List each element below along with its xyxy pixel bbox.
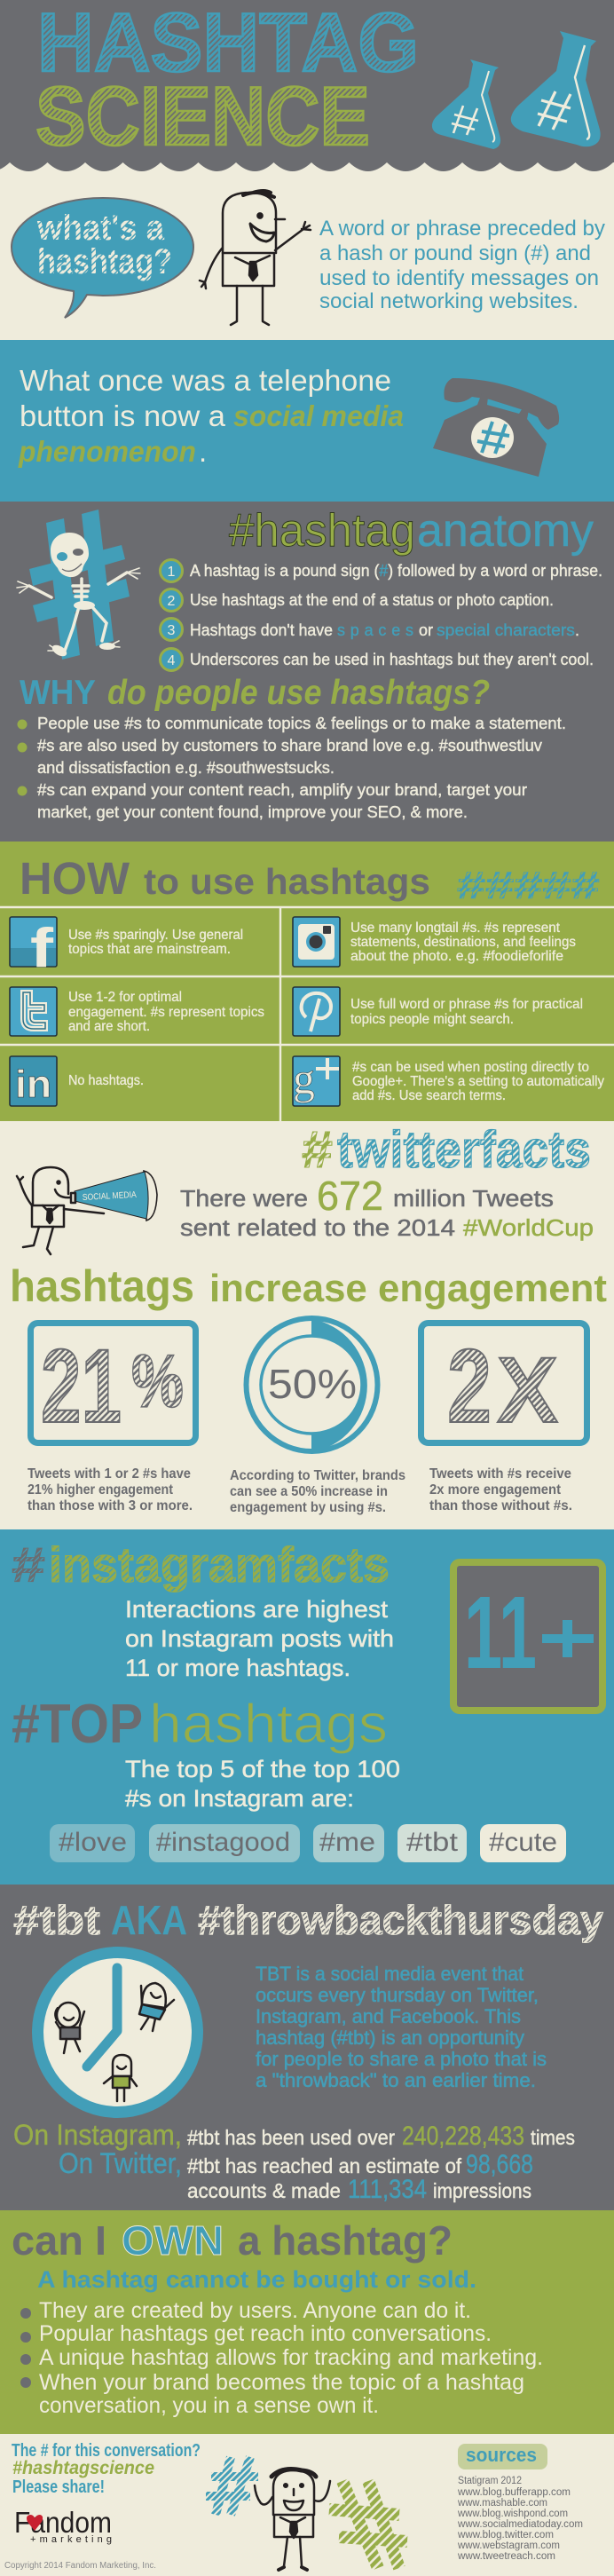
- panel: what's a hashtag: [12, 191, 605, 325]
- heading: #tbt AKA #throwbackthursday: #throwbackthursday: [198, 1897, 603, 1943]
- badge 1: [160, 559, 183, 582]
- why list: [18, 714, 566, 821]
- heading: #twitterfacts: twitterfacts: [337, 1121, 591, 1179]
- stat: on twitter: #tbt has reached an estimate of: [187, 2154, 461, 2177]
- tag: me: [313, 1824, 384, 1862]
- heading: can I own a hashtag: [12, 2217, 453, 2264]
- definition text: [319, 217, 605, 313]
- text: twitter: and are short.: [68, 1019, 150, 1034]
- cartoon man with megaphone: [17, 1167, 157, 1254]
- logo: fandom marketing: Fandom: [14, 2506, 112, 2539]
- definition text: used to identify messages on: [319, 266, 599, 290]
- text: google plus: add #s. Use search terms.: [352, 1088, 506, 1103]
- logo: fandom marketing: +marketing: [30, 2534, 112, 2545]
- stat: on twitter: 111,334: [348, 2175, 427, 2204]
- text: 672 million tweets: million Tweets: [393, 1187, 554, 1212]
- text: 672 million tweets: #WorldCup: [463, 1216, 594, 1241]
- panel: can i own a hashtag: [0, 2210, 614, 2434]
- heading: #TOP hashtags: #TOP: [12, 1694, 143, 1755]
- panel: telephone button: [0, 340, 614, 502]
- text: 672 million tweets: sent related to the 2014: [180, 1216, 455, 1241]
- own list: Popular hashtags get reach into conversations.: [39, 2321, 492, 2346]
- stat: on twitter: On Twitter,: [59, 2147, 182, 2179]
- panel: how to use hashtags: [0, 842, 614, 1121]
- heading: how: HOW: [20, 853, 130, 904]
- text: instagram: [350, 921, 576, 964]
- stat box: 2X: 2: [447, 1328, 492, 1445]
- why list: #s can expand your content reach, amplify your brand, target your: [37, 780, 527, 799]
- heading: how: [20, 853, 430, 904]
- speech bubble: [12, 198, 193, 318]
- stat box: 2X: X: [497, 1339, 558, 1442]
- text: google plus: [352, 1060, 604, 1103]
- text: tbt description: occurs every thursday on Twitter,: [256, 1984, 539, 2006]
- definition text: A word or phrase preceded by: [319, 217, 605, 241]
- icon: small flask: [432, 59, 500, 149]
- text: facebook: topics that are mainstream.: [68, 942, 231, 957]
- definition text: social networking websites.: [319, 289, 579, 313]
- sources tag: sources: [466, 2444, 537, 2466]
- definition text: a hash or pound sign (#) and: [319, 241, 591, 265]
- figure: man in green: [104, 2055, 137, 2101]
- icon: facebook: [10, 917, 57, 979]
- icon: blue hash: [206, 2457, 258, 2515]
- sources list: www.tweetreach.com: [457, 2551, 555, 2562]
- icon: google plus: [293, 1054, 340, 1106]
- stat: on twitter: accounts & made: [187, 2179, 341, 2202]
- figure: woman: [55, 2003, 84, 2053]
- text: 672 million tweets: There were: [180, 1187, 308, 1212]
- stat: on instagram: times: [531, 2126, 575, 2149]
- text: interactions: 11 or more hashtags.: [125, 1655, 350, 1681]
- badge 4: 4: [168, 653, 176, 668]
- text: instagram: Use many longtail #s. #s represent: [350, 921, 561, 936]
- text: tbt description: Instagram, and Facebook. This: [256, 2005, 521, 2027]
- item 3: or: [419, 621, 433, 639]
- text: interactions: [125, 1596, 394, 1681]
- icon: large flask: [511, 31, 601, 146]
- badge 3: [160, 618, 183, 641]
- why list: market, get your content found, improve your SEO, & more.: [37, 802, 468, 821]
- own list: [20, 2298, 543, 2418]
- heading: can I own a hashtag: a hashtag?: [238, 2217, 453, 2264]
- icon: google plus: g: [293, 1054, 315, 1103]
- item 4: Underscores can be used in hashtags but they aren't cool.: [190, 651, 594, 668]
- item 3: .: [575, 621, 579, 639]
- sources list: www.mashable.com: [457, 2498, 547, 2509]
- heading: #hashtag anatomy: [229, 505, 594, 557]
- sources list: Statigram 2012: [458, 2476, 522, 2486]
- heading: #TOP hashtags: hashtags: [149, 1694, 388, 1755]
- heading: hashtags increase engagement: hashtags: [10, 1261, 194, 1311]
- panel: throwback thursday: [0, 1885, 614, 2210]
- text: linkedin: No hashtags.: [68, 1073, 144, 1088]
- tag: cute: #cute: [489, 1828, 557, 1857]
- text: top 5: #s on Instagram are:: [125, 1785, 354, 1812]
- icon: twitter: [10, 987, 57, 1036]
- text: 672 million tweets: 672: [317, 1173, 383, 1219]
- caption: 50%: According to Twitter, brands: [230, 1468, 405, 1483]
- text: twitter: [68, 990, 264, 1034]
- heading: can I own a hashtag: can I: [12, 2217, 106, 2264]
- cartoon man pointing: [200, 191, 311, 325]
- text: twitter: Use 1-2 for optimal: [68, 990, 182, 1005]
- heading: #tbt AKA #throwbackthursday: AKA: [111, 1897, 187, 1943]
- text: facebook: [68, 928, 243, 957]
- text: tbt description: for people to share a photo that is: [256, 2048, 547, 2070]
- icon: facebook: f: [30, 918, 53, 979]
- tag: instagood: #instagood: [156, 1828, 290, 1857]
- tag: me: #me: [319, 1828, 375, 1857]
- statement text: [18, 364, 404, 468]
- heading: #tbt AKA #throwbackthursday: #tbt: [13, 1897, 100, 1943]
- panel: footer: [4, 2441, 583, 2571]
- statement text: button is now a: [20, 399, 226, 432]
- heading: can I own a hashtag: OWN: [122, 2217, 224, 2264]
- caption: 50%: engagement by using #s.: [230, 1500, 386, 1515]
- megaphone label: SOCIAL MEDIA: [83, 1190, 137, 1203]
- heading: #tbt AKA #throwbackthursday: [13, 1897, 603, 1943]
- heading: #hashtag anatomy: #hashtag: [229, 505, 415, 557]
- caption: 50%: can see a 50% increase in: [230, 1484, 388, 1499]
- icon: pinterest: [293, 987, 340, 1036]
- caption: 2X: than those without #s.: [429, 1498, 572, 1513]
- sources list: www.blog.twitter.com: [457, 2530, 554, 2540]
- stat: on twitter: impressions: [433, 2179, 531, 2202]
- panel: twitter facts: [17, 1121, 594, 1254]
- badge 1: 1: [168, 565, 176, 580]
- item 3: Hashtags don't have: [190, 621, 333, 639]
- text: interactions: Interactions are highest: [125, 1596, 389, 1623]
- icon: linkedin: [10, 1056, 57, 1106]
- stat box: 11+: [453, 1562, 602, 1711]
- icon: clock with figures: [37, 1953, 197, 2113]
- text: pinterest: [350, 997, 583, 1027]
- own list: When your brand becomes the topic of a hashtag: [39, 2370, 524, 2395]
- call to share: Please share!: [12, 2477, 105, 2497]
- statement text: .: [199, 435, 207, 468]
- call to share: [12, 2441, 201, 2497]
- tag: love: #love: [59, 1828, 127, 1857]
- text: pinterest: Use full word or phrase #s for practical: [350, 997, 583, 1012]
- icon: green hash: [329, 2481, 407, 2568]
- icon: telephone: [433, 378, 559, 477]
- sources list: [457, 2476, 583, 2562]
- caption: 2X: Tweets with #s receive: [429, 1466, 571, 1482]
- stat box: 21%: [30, 1323, 195, 1445]
- tag: love: [50, 1824, 135, 1862]
- heading: #instagramfacts: instagramfacts: [49, 1537, 390, 1592]
- heading: #hashtag anatomy: anatomy: [417, 505, 594, 557]
- text: google plus: Google+. There's a setting to automatically: [352, 1074, 604, 1089]
- panel: instagram facts: [0, 1529, 614, 1885]
- caption: 50%: [230, 1468, 405, 1515]
- caption: 2X: [429, 1466, 572, 1513]
- decorative hashes: #####: [456, 864, 600, 907]
- icon: skeleton on a hash sign: [17, 510, 140, 660]
- tag: instagood: [149, 1824, 300, 1862]
- call to share: The # for this conversation?: [12, 2441, 201, 2461]
- text: interactions: on Instagram posts with: [125, 1625, 394, 1652]
- heading: why: do people use hashtags?: [107, 674, 490, 712]
- sources list: www.webstagram.com: [457, 2540, 560, 2551]
- text: instagram: about the photo. e.g. #foodieforlife: [350, 949, 563, 964]
- badge 2: 2: [168, 594, 176, 609]
- badge 4: [160, 648, 183, 671]
- heading: hashtags increase engagement: increase engagement: [209, 1267, 607, 1310]
- call to share: #hashtagscience: [12, 2458, 154, 2478]
- badge 3: 3: [168, 623, 176, 638]
- stat ring: 50%: [247, 1318, 378, 1452]
- heading: how: to use hashtags: [144, 861, 430, 902]
- why list: and dissatisfaction e.g. #southwestsucks.: [37, 758, 335, 777]
- statement text: phenomenon: [18, 435, 196, 468]
- text: tbt description: TBT is a social media event that: [256, 1963, 523, 1985]
- stat: on instagram: On Instagram,: [13, 2119, 182, 2151]
- stat: on instagram: #tbt has been used over: [187, 2126, 395, 2149]
- badge 2: [160, 589, 183, 611]
- caption: 21%: [28, 1466, 193, 1513]
- stat: on twitter: 98,668: [466, 2150, 533, 2179]
- icon: instagram: [293, 917, 340, 967]
- title: SCIENCE: SCIENCE: [35, 69, 370, 162]
- caption: 21%: than those with 3 or more.: [28, 1498, 193, 1513]
- numbered list: [160, 559, 602, 671]
- text: google plus: #s can be used when posting directly to: [352, 1060, 589, 1075]
- bubble text line 2: hashtag?: [37, 242, 172, 281]
- text: instagram: statements, destinations, and feelings: [350, 935, 576, 950]
- statement text: What once was a telephone: [20, 364, 391, 397]
- icon: linkedin: in: [15, 1063, 51, 1106]
- why list: People use #s to communicate topics & feelings or to make a statement.: [37, 714, 566, 732]
- item 3: spaces: [337, 621, 413, 639]
- heading: #instagramfacts: #: [12, 1537, 45, 1592]
- own list: A unique hashtag allows for tracking and marketing.: [39, 2345, 543, 2370]
- panel: hashtags increase engagement: [10, 1261, 607, 1515]
- stat box: 21%: %: [131, 1339, 184, 1423]
- text: 672 million tweets: [180, 1173, 594, 1241]
- heading: #twitterfacts: #: [302, 1121, 333, 1179]
- statement text: social media: [233, 399, 404, 432]
- caption: 21%: Tweets with 1 or 2 #s have: [28, 1466, 191, 1482]
- sources list: www.blog.bufferapp.com: [457, 2487, 571, 2498]
- stat: on instagram: [13, 2119, 575, 2151]
- text: top 5: [125, 1756, 400, 1812]
- heading: why: WHY: [20, 674, 96, 712]
- text: top 5: The top 5 of the top 100: [125, 1756, 400, 1782]
- stat box: 21%: 21: [41, 1328, 122, 1445]
- bubble text line 1: what's a: [36, 209, 165, 248]
- stat box: 11+: 11: [464, 1575, 537, 1690]
- sources list: www.socialmediatoday.com: [457, 2519, 583, 2530]
- caption: 2X: 2x more engagement: [429, 1482, 561, 1497]
- tag: tbt: #tbt: [406, 1828, 459, 1857]
- panel: hashtag anatomy: [0, 502, 614, 842]
- figure: man in blue: [139, 1983, 174, 2031]
- stat ring: 50%: 50%: [268, 1361, 357, 1407]
- text: tbt description: a "throwback" to an earlier time.: [256, 2069, 536, 2091]
- heading: #TOP hashtags: [12, 1694, 388, 1755]
- item 2: Use hashtags at the end of a status or photo caption.: [190, 591, 554, 609]
- panel: header: [0, 0, 614, 171]
- text: tbt description: [256, 1963, 547, 2091]
- text: tbt description: hashtag (#tbt) is an opportunity: [256, 2027, 524, 2049]
- own list: They are created by users. Anyone can do it.: [39, 2298, 471, 2323]
- sources list: www.blog.wishpond.com: [457, 2509, 568, 2519]
- copyright: Copyright 2014 Fandom Marketing, Inc.: [4, 2561, 156, 2571]
- item 3: special characters: [437, 621, 575, 639]
- tag: cute: [480, 1824, 566, 1862]
- text: twitter: engagement. #s represent topics: [68, 1005, 264, 1020]
- item 1: A hashtag is a pound sign (#) followed by a word or phrase.: [190, 562, 602, 580]
- heading: hashtags increase engagement: [10, 1261, 607, 1311]
- stat: on twitter: [59, 2147, 533, 2204]
- text: facebook: Use #s sparingly. Use general: [68, 928, 243, 943]
- tag: tbt: [398, 1824, 467, 1862]
- stat: on instagram: 240,228,433: [402, 2122, 524, 2151]
- why list: #s are also used by customers to share brand love e.g. #southwestluv: [37, 736, 543, 755]
- caption: 21%: 21% higher engagement: [28, 1482, 173, 1497]
- item 3: [190, 621, 579, 639]
- subheading: A hashtag cannot be bought or sold.: [37, 2266, 476, 2293]
- text: pinterest: topics people might search.: [350, 1012, 514, 1027]
- stat box: 2X: [421, 1323, 587, 1445]
- cartoon man cheering: [255, 2469, 330, 2570]
- own list: conversation, you in a sense own it.: [39, 2393, 379, 2418]
